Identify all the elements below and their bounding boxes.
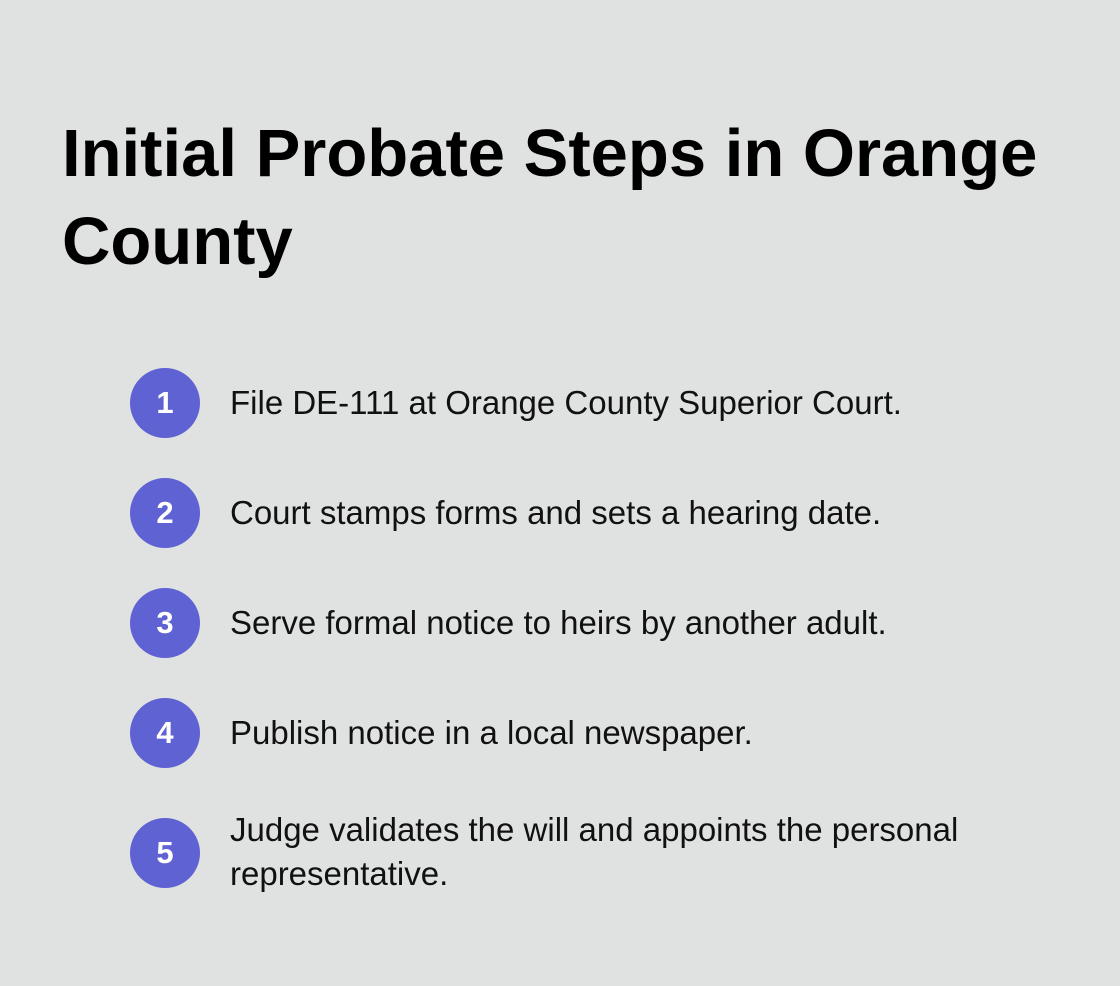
step 2: Court stamps forms and sets a hearing date. [230,494,881,531]
step 2 [130,478,881,548]
step 3: 3 [156,605,174,640]
step 5: Judge validates the will and appoints the personal representative. [230,811,958,892]
step 4: 4 [156,715,174,750]
step 3: Serve formal notice to heirs by another adult. [230,604,887,641]
step 1: File DE-111 at Orange County Superior Court. [230,384,902,421]
step 1 [130,368,902,438]
step 2: 2 [156,495,174,530]
step 5: 5 [156,835,174,870]
step 3 [130,588,887,658]
step 1: 1 [156,385,174,420]
title: Initial Probate Steps in Orange County [62,116,1037,279]
step 4: Publish notice in a local newspaper. [230,714,753,751]
step 4 [130,698,753,768]
